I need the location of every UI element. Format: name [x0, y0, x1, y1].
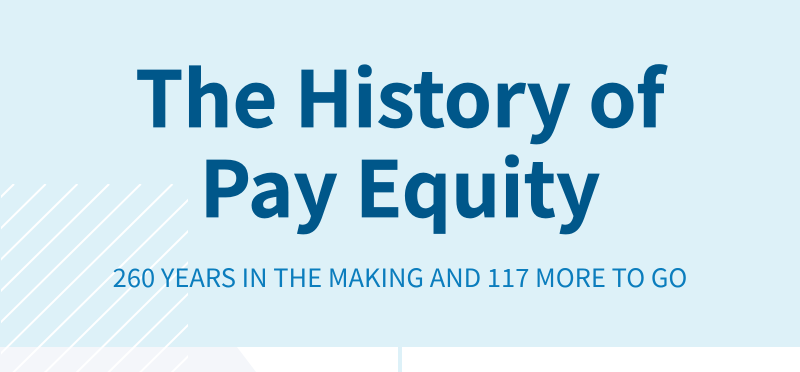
diagonal hatch pattern — [1, 184, 188, 372]
title: The History of — [135, 39, 665, 150]
subtitle: 260 YEARS IN THE MAKING AND 117 MORE TO GO — [113, 258, 687, 295]
title: Pay Equity — [200, 129, 600, 240]
title — [135, 39, 668, 240]
vertical timeline divider — [398, 347, 402, 372]
